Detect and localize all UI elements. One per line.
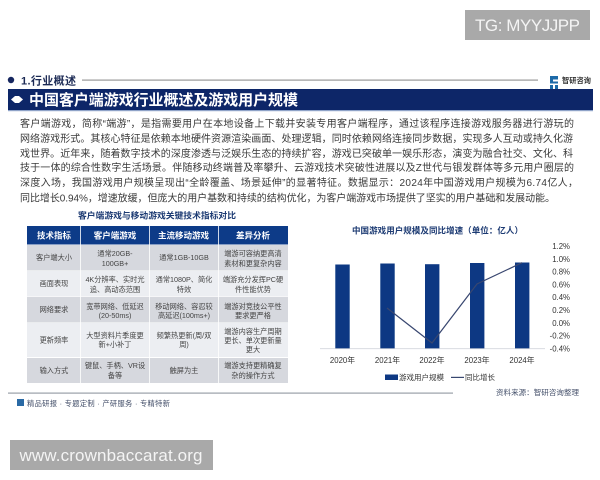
right axis labels: 1.2% [552, 242, 570, 251]
table text: 通常20GB- [97, 249, 133, 258]
table text: 要求更严格 [235, 311, 272, 320]
table text: 端游对竞技公平性 [224, 302, 282, 311]
watermark box: TG [465, 10, 590, 40]
table text: 频繁热更新(周/双 [157, 331, 211, 340]
table text: 大型资料片季度更 [86, 331, 144, 340]
legend: 游戏用户规模 [399, 372, 444, 382]
right axis labels: -0.4% [550, 344, 570, 353]
table text: 端游可容纳更高清 [224, 249, 282, 258]
intro paragraph [20, 117, 578, 204]
table text: 通常1080P、简化 [156, 275, 212, 284]
footer rule [8, 392, 453, 394]
category labels: 2021年 [375, 355, 400, 365]
watermark box: website [10, 440, 213, 470]
table text: 高延迟(100ms+) [158, 311, 210, 320]
title banner: 中国客户端游戏行业概述及游戏用户规模 [29, 91, 298, 109]
table text [36, 249, 283, 380]
table text: 100GB+ [102, 259, 128, 268]
table text: 触屏为主 [170, 366, 198, 375]
comparison table [27, 226, 288, 383]
bars [335, 262, 529, 348]
table header: 技术指标 [37, 230, 71, 240]
table text: 更长、单次更新量 [224, 336, 282, 345]
footer slogan: 精品研报 · 专题定制 · 产研服务 · 专精特新 [27, 399, 170, 408]
table text: 备等 [108, 371, 122, 380]
table text: 端游充分发挥PC硬 [223, 275, 283, 284]
section heading [8, 74, 538, 88]
table text: 键鼠、手柄、VR设 [85, 361, 145, 370]
category labels: 2022年 [419, 355, 445, 365]
table text: 特效 [177, 285, 191, 294]
table text: 新+小补丁 [99, 340, 131, 349]
source note: 资料来源：智研咨询整理 [496, 387, 580, 397]
table row backgrounds [27, 226, 288, 383]
table text: 输入方式 [40, 366, 68, 375]
table text: 素材和更复杂内容 [224, 259, 282, 268]
table text: 更大 [246, 345, 260, 354]
table header: 主流移动游戏 [158, 230, 209, 240]
table text: 追、高动态范围 [90, 285, 140, 294]
right axis labels: 0.4% [552, 293, 570, 302]
category labels: 2020年 [330, 355, 355, 365]
table header [27, 226, 288, 244]
section heading: 1.行业概述 [21, 74, 76, 88]
intro paragraph: 客户端游戏，简称“端游”，是指需要用户在本地设备上下载并安装专用客户端程序，通过该程序连接游戏服务器进行游玩的 [20, 117, 574, 130]
table text: (20-50ms) [99, 311, 131, 320]
category labels: 2023年 [464, 355, 490, 365]
table text: 4K分辨率、实时光 [85, 275, 145, 284]
right axis labels: -0.2% [550, 332, 570, 341]
table text: 端游支持更精确复 [224, 361, 282, 370]
table text: 画面表现 [40, 279, 68, 288]
report page content [8, 74, 593, 408]
table text: 宽带网络、低延迟 [86, 302, 144, 311]
table text: 周) [179, 340, 189, 349]
table text: 移动网络、容忍较 [155, 302, 213, 311]
table header: 客户端游戏 [94, 230, 137, 240]
chart title: 中国游戏用户规模及同比增速（单位：亿人） [352, 226, 523, 236]
right axis labels: 0.8% [552, 268, 570, 277]
brand logo [550, 76, 591, 89]
table text: 杂的操作方式 [231, 371, 275, 380]
table text: 更新频率 [40, 336, 68, 344]
category labels: 2024年 [509, 355, 535, 365]
right axis labels: 0.2% [552, 306, 570, 315]
intro paragraph: 技于一体的综合性数字生活场景。伴随移动终端普及率攀升、云游戏技术突破性进展以及Z世代与银发群体等多元用户圈层的 [20, 161, 574, 174]
combo chart [320, 242, 570, 382]
table text: 件性能优势 [235, 285, 271, 294]
table text: 端游内容生产周期 [224, 327, 282, 336]
intro paragraph: 同比增长0.94%，增速放缓，但庞大的用户基数和持续的结构优化，为客户端游戏市场提供了坚实的用户基础和发展动能。 [20, 192, 555, 204]
legend [385, 372, 496, 382]
table text: 网络要求 [40, 305, 68, 314]
table text: 通常1GB-10GB [159, 253, 209, 262]
brand logo: 智研咨询 [562, 76, 591, 85]
title banner [8, 89, 593, 111]
right axis labels: 1.0% [552, 255, 570, 264]
category labels [330, 355, 535, 365]
intro paragraph: 网络游戏形式。其核心特征是依赖本地硬件资源渲染画面、处理逻辑，同时依赖网络连接同步数据，实现多人互动或持久化游 [20, 132, 573, 145]
right axis labels [550, 242, 570, 353]
right axis labels: 0.6% [552, 280, 570, 289]
intro paragraph: 深度入场，我国游戏用户规模呈现出“全龄覆盖、场景延伸”的显著特征。数据显示：2024年中国游戏用户规模为6.74亿人， [20, 176, 578, 189]
right axis labels: 0.0% [552, 319, 570, 328]
table header: 差异分析 [236, 230, 270, 240]
growth line [387, 263, 522, 343]
watermark box: TG: TG: MYYJJPP [475, 16, 580, 35]
intro paragraph: 戏世界。近年来，随着数字技术的深度渗透与泛娱乐生态的持续扩容，游戏已突破单一娱乐形态，演变为融合社交、文化、科 [20, 147, 573, 160]
watermark box: website: www.crownbaccarat.org [18, 446, 202, 465]
legend: 同比增长 [465, 372, 496, 382]
table text: 客户端大小 [36, 253, 72, 262]
table title: 客户端游戏与移动游戏关键技术指标对比 [78, 210, 236, 220]
